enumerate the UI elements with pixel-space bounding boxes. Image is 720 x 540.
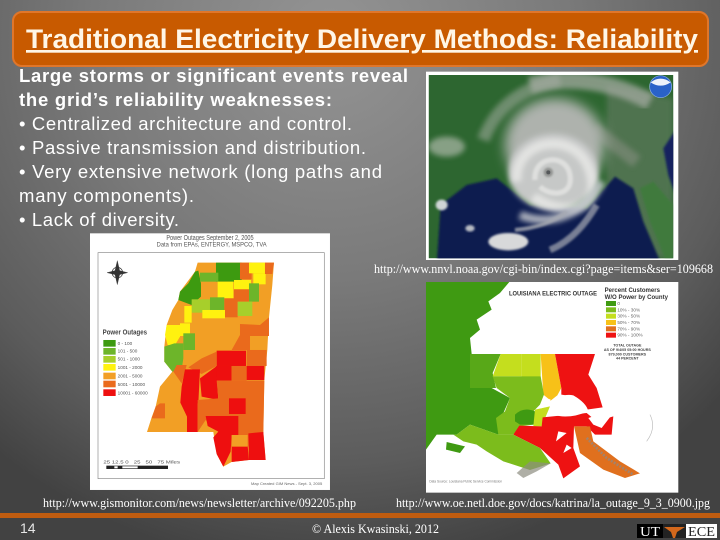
logo: UT ECE: ECE (688, 525, 715, 540)
compass rose (107, 261, 128, 285)
map legend: 5001 - 10000 (118, 382, 146, 387)
total outage note: AS OF 9/4/05 05:00 HOURS (604, 348, 651, 352)
county choropleth (147, 263, 274, 467)
map legend (103, 330, 148, 396)
map legend: 0 - 100 (118, 341, 133, 346)
map legend: W/O Power by County (605, 295, 669, 301)
satellite image of hurricane (426, 72, 678, 265)
map legend: 30% - 50% (617, 314, 640, 319)
scale bar (103, 459, 181, 469)
map legend: 70% - 90% (617, 326, 640, 331)
total outage note: 879,000 CUSTOMERS (609, 352, 647, 356)
map legend: 2001 - 5000 (118, 373, 143, 378)
map legend: 1001 - 2000 (118, 365, 143, 370)
map legend (605, 288, 669, 338)
copyright: © Alexis Kwasinski, 2012 (312, 521, 439, 536)
map credit: Data Source: Louisiana Public Service Commission (429, 479, 502, 483)
title: Traditional Electricity Delivery Methods: Reliability (26, 24, 698, 54)
parish choropleth (426, 282, 653, 478)
map: Mississippi power outages (90, 233, 330, 490)
text block: reliability weaknesses: many components). (19, 185, 194, 206)
logo: UT ECE (637, 524, 717, 540)
map title (157, 235, 267, 248)
footer rule (0, 513, 720, 518)
map legend: Power Outages (103, 330, 147, 337)
scale bar: 25 12.5 0 25 50 75 Miles (103, 459, 181, 465)
map legend: Percent Customers (605, 288, 661, 294)
map legend: 10001 - 60000 (118, 390, 148, 395)
map legend: 90% - 100% (617, 333, 643, 338)
source URL: Louisiana map: http://www.oe.netl.doe.gov/docs/katrina/la_outage_9_3_0900.jpg (396, 496, 711, 510)
text block: reliability weaknesses: • Lack of diversity. (19, 209, 179, 230)
map legend: 101 - 500 (118, 349, 138, 354)
total outage note: TOTAL OUTAGE (613, 344, 642, 348)
total outage note: 44 PERCENT (616, 357, 639, 361)
source URL: hurricane image: http://www.nnvl.noaa.gov/cgi-bin/index.cgi?page=items&ser=109668 (374, 262, 713, 276)
text block: reliability weaknesses: • Passive transmission and distribution. (19, 137, 366, 158)
map legend: 10% - 30% (617, 307, 640, 312)
title banner (13, 12, 708, 66)
map title: LOUISIANA ELECTRIC OUTAGE (509, 291, 597, 297)
slide number: 14 (20, 520, 36, 536)
map legend: 50% - 70% (617, 320, 640, 325)
logo: UT ECE: UT (640, 525, 660, 540)
map legend: 501 - 1000 (118, 357, 140, 362)
text block: reliability weaknesses: the grid’s reliability weaknesses: (19, 89, 332, 110)
map legend: 0 (617, 301, 620, 306)
total outage note (604, 344, 651, 361)
icon: NOAA logo (650, 76, 672, 98)
text block: reliability weaknesses: • Very extensive network (long paths and (19, 161, 382, 182)
text block: reliability weaknesses (19, 65, 408, 230)
map: Louisiana electric outage (426, 282, 678, 493)
map title: Data from EPAs, ENTERGY, MSPCO, TVA (157, 242, 267, 248)
source URL: Mississippi map: http://www.gismonitor.com/news/newsletter/archive/092205.php (43, 496, 356, 510)
map title: Power Outages September 2, 2005 (166, 235, 254, 242)
text block: reliability weaknesses: Large storms or significant events reveal (19, 65, 408, 86)
text block: reliability weaknesses: • Centralized architecture and control. (19, 113, 352, 134)
map credit: Map Created GIM News - Sept. 3, 2005 (251, 482, 322, 486)
